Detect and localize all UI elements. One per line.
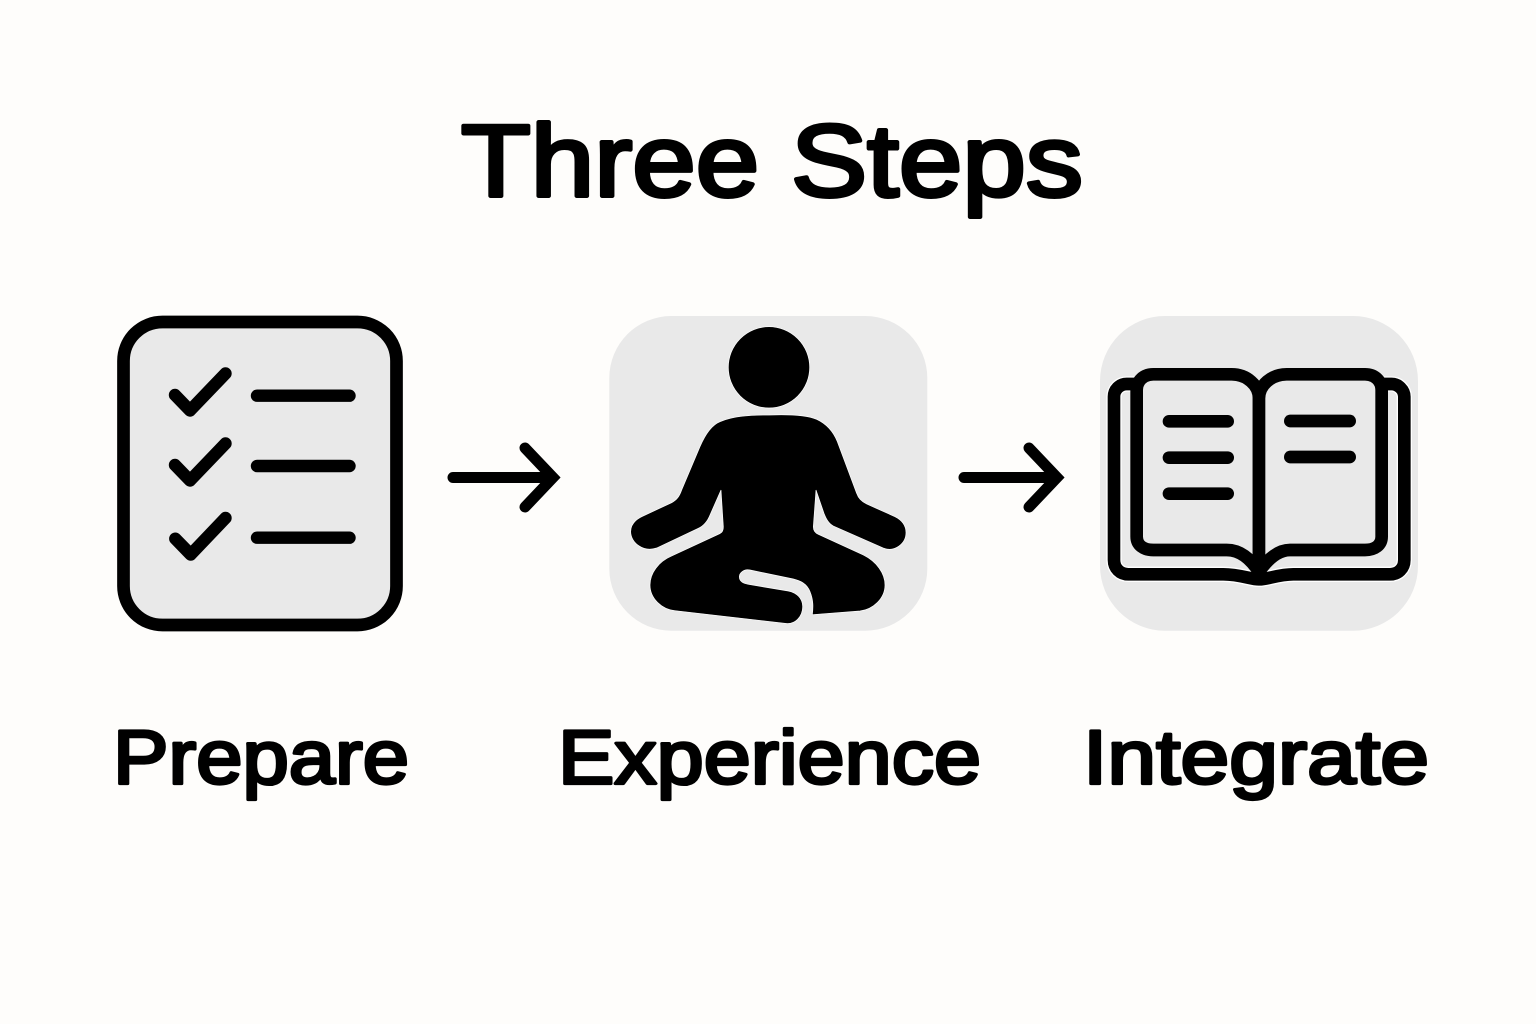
book panel <box>1100 316 1418 631</box>
label: Prepare: Prepare <box>113 716 409 800</box>
icon: meditating person <box>609 316 927 631</box>
icon: checklist <box>124 322 396 625</box>
label: Experience: Experience <box>558 716 981 800</box>
arrow: experience to integrate <box>964 448 1057 507</box>
person panel <box>609 316 927 631</box>
checklist card <box>124 322 396 625</box>
title: Three Steps <box>461 104 1083 218</box>
book drawing <box>1114 374 1404 579</box>
label: Integrate: Integrate <box>1083 716 1429 800</box>
arrow: prepare to experience <box>453 448 553 507</box>
icon: open book <box>1100 316 1418 631</box>
person figure <box>631 327 906 624</box>
checklist marks and lines <box>175 374 350 554</box>
